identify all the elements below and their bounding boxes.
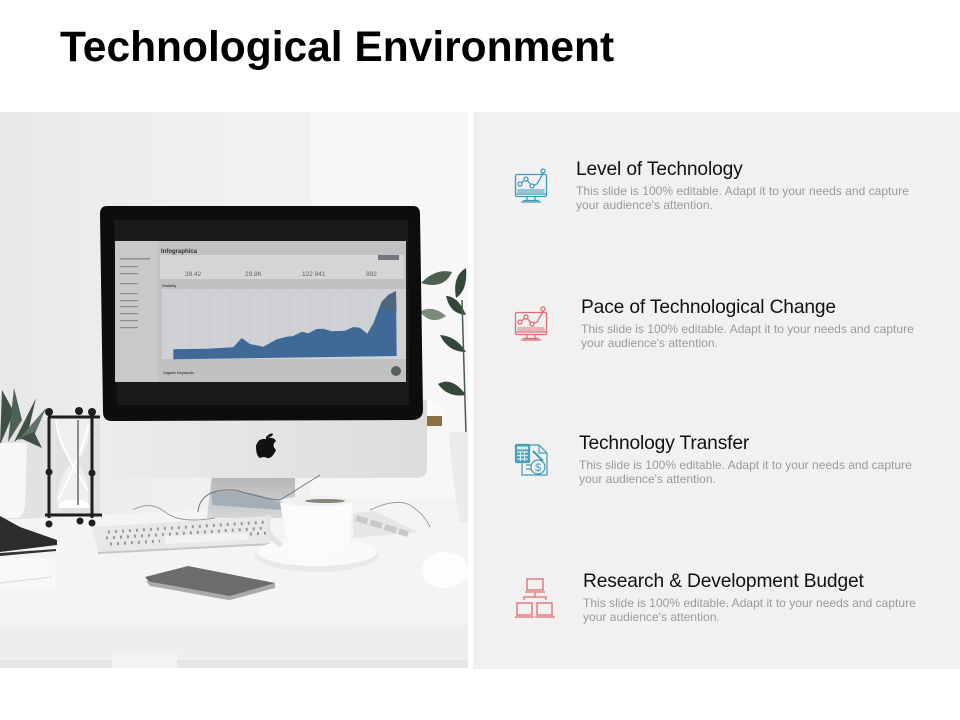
icon: calculator and invoice xyxy=(514,444,548,476)
text: technology transfer: Technology Transfer xyxy=(579,433,749,454)
brown object behind monitor xyxy=(427,402,442,426)
screen dashboard: 992 xyxy=(366,271,377,278)
panel: right list background xyxy=(473,112,960,669)
apple logo xyxy=(256,433,276,458)
plant: right xyxy=(420,268,466,434)
screen dashboard: 122 841 xyxy=(302,271,326,278)
text: level of technology xyxy=(576,159,909,212)
screen dashboard: Visibility xyxy=(162,284,176,288)
text: research and development budget xyxy=(583,571,916,624)
mouse xyxy=(422,552,468,588)
silver chin xyxy=(100,400,427,478)
notebooks xyxy=(0,516,57,590)
text: level of technology: This slide is 100% editable. Adapt it to your needs and capture xyxy=(576,184,909,198)
computer monitor xyxy=(100,206,427,518)
text: level of technology: Level of Technology xyxy=(576,159,743,180)
text: pace of technological change: This slide is 100% editable. Adapt it to your needs and capture xyxy=(581,322,914,336)
icon: monitor with chart (teal) xyxy=(514,168,548,203)
smartphone xyxy=(145,566,275,600)
text: pace of technological change: Pace of Technological Change xyxy=(581,297,836,318)
text: level of technology: your audience's attention. xyxy=(576,198,713,212)
left plant xyxy=(0,388,46,448)
text: research and development budget: Research & Development Budget xyxy=(583,571,864,592)
coffee cup and saucer xyxy=(255,496,379,572)
icon: calculator and invoice: $ xyxy=(535,462,541,474)
text: technology transfer: This slide is 100% editable. Adapt it to your needs and capture xyxy=(579,458,912,472)
area chart xyxy=(173,291,397,359)
screen dashboard: 29.8K xyxy=(245,271,263,278)
text: technology transfer: your audience's attention. xyxy=(579,472,716,486)
screen dashboard xyxy=(120,249,406,376)
icon: monitor with chart (red) xyxy=(514,306,548,341)
text: pace of technological change xyxy=(581,297,914,350)
text: research and development budget: your audience's attention. xyxy=(583,610,720,624)
wall background xyxy=(0,112,468,532)
screen dashboard: Organic Keywords xyxy=(163,371,194,375)
hourglass xyxy=(45,407,102,528)
icon: networked laptops xyxy=(515,578,555,618)
stand xyxy=(207,476,295,518)
title: Technological Environment xyxy=(60,24,614,71)
pot: right xyxy=(449,432,468,522)
cables xyxy=(133,475,430,527)
left pot xyxy=(0,443,27,518)
text: research and development budget: This slide is 100% editable. Adapt it to your needs and capture xyxy=(583,596,916,610)
black bezel xyxy=(100,206,423,421)
screen xyxy=(114,220,409,405)
photo: desk with computer xyxy=(0,112,468,668)
text: technology transfer xyxy=(579,433,912,486)
text: pace of technological change: your audience's attention. xyxy=(581,336,718,350)
screen dashboard: 39.42 xyxy=(185,271,202,278)
keyboard xyxy=(92,511,417,554)
desk xyxy=(0,498,468,668)
screen dashboard: Infographica xyxy=(161,249,198,255)
